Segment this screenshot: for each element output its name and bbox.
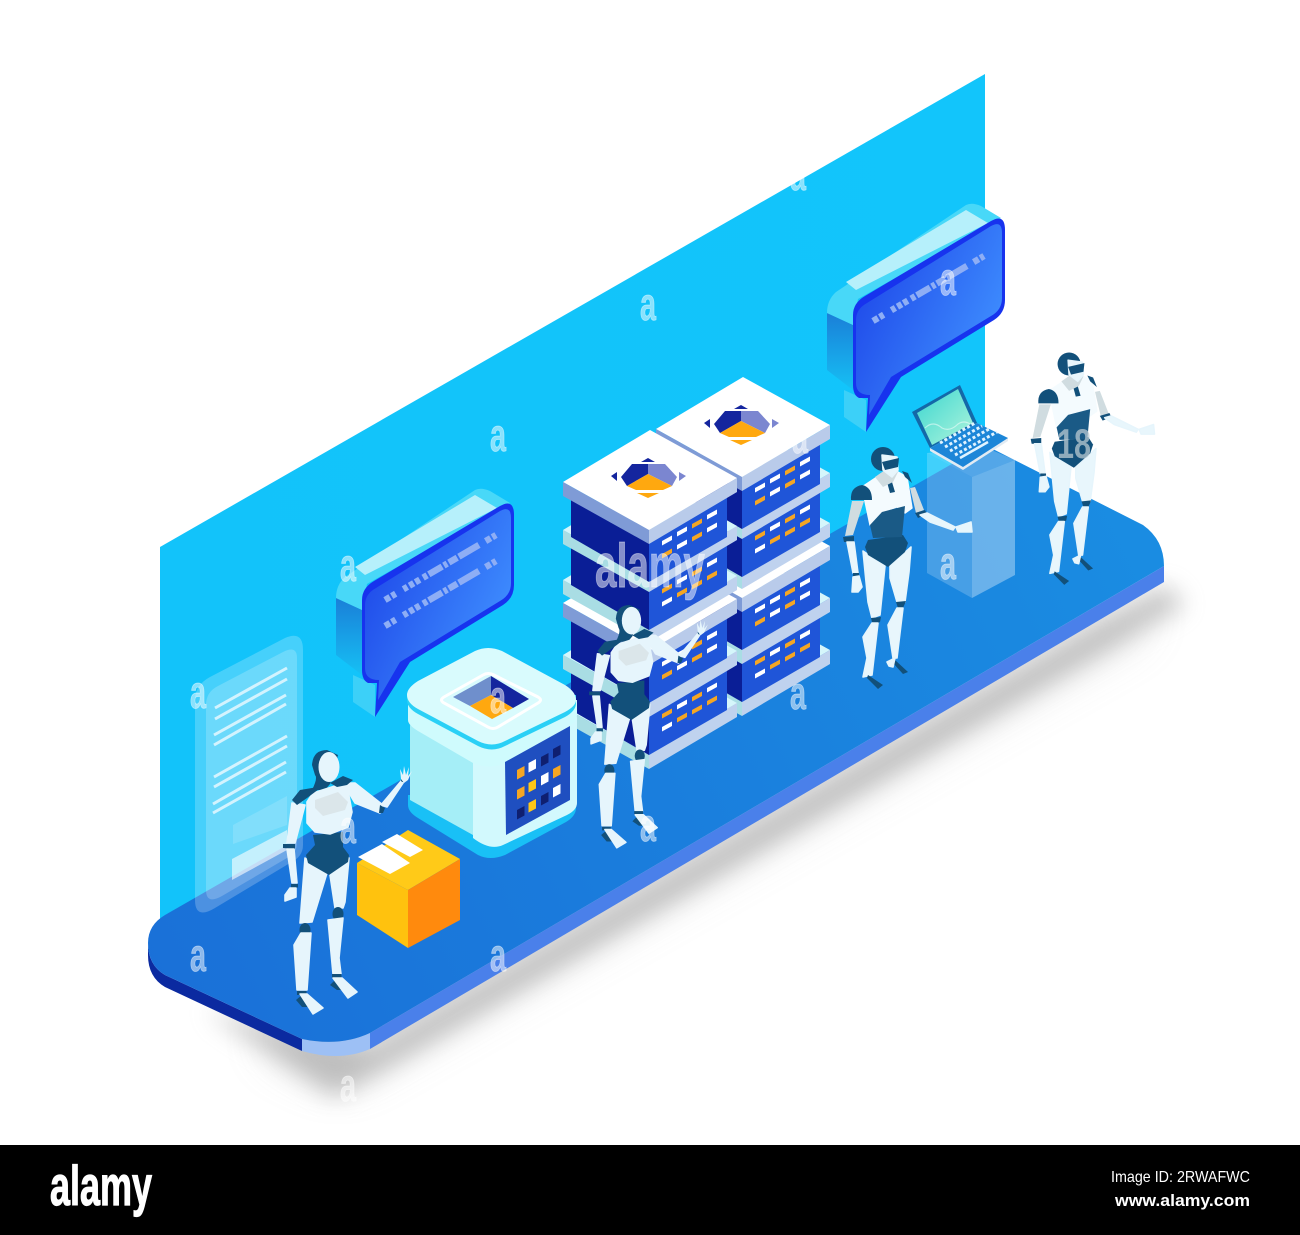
watermark letters: a [340,801,356,853]
watermark letters: a [190,666,206,718]
floor platform [148,445,1164,1056]
watermark word: alamy [595,532,705,601]
platform drop shadow [205,585,1185,1098]
footer logo: alamy [50,1154,152,1217]
watermark letters: a [640,278,656,330]
watermark letters: a [190,929,206,981]
watermark letters: a [792,411,808,463]
watermark letters: a [790,667,806,719]
watermark letters: a [340,539,356,591]
watermark fragment on robot: 18 [1057,420,1091,467]
image id: Image ID: 2RWAFWC [1111,1169,1250,1186]
server rack: back stack [656,377,830,716]
watermark letters: a [790,148,806,200]
robot: far right [1031,353,1155,585]
speech bubble: left [336,489,514,717]
watermark letters: a [490,929,506,981]
watermark letters: a [640,799,656,851]
speech bubble: right [827,204,1005,432]
watermark letters: a [490,671,506,723]
robot: left [283,750,412,1014]
panel: translucent phone screen [195,636,303,912]
watermark letters: a [340,1059,356,1111]
laptop pedestal [927,448,1015,598]
watermark letters [190,148,956,1111]
robot: right-center [843,447,972,689]
watermark letters: a [490,409,506,461]
watermark letters: a [940,537,956,589]
watermark letters: a [940,253,956,305]
cardboard box [357,830,460,948]
laptop [912,385,1008,470]
robot: center [589,605,708,848]
back wall [160,74,985,930]
website: www.alamy.com [1114,1191,1250,1210]
server rack: front stack [563,430,737,769]
footer bar [0,1145,1300,1235]
cube machine [407,648,577,858]
